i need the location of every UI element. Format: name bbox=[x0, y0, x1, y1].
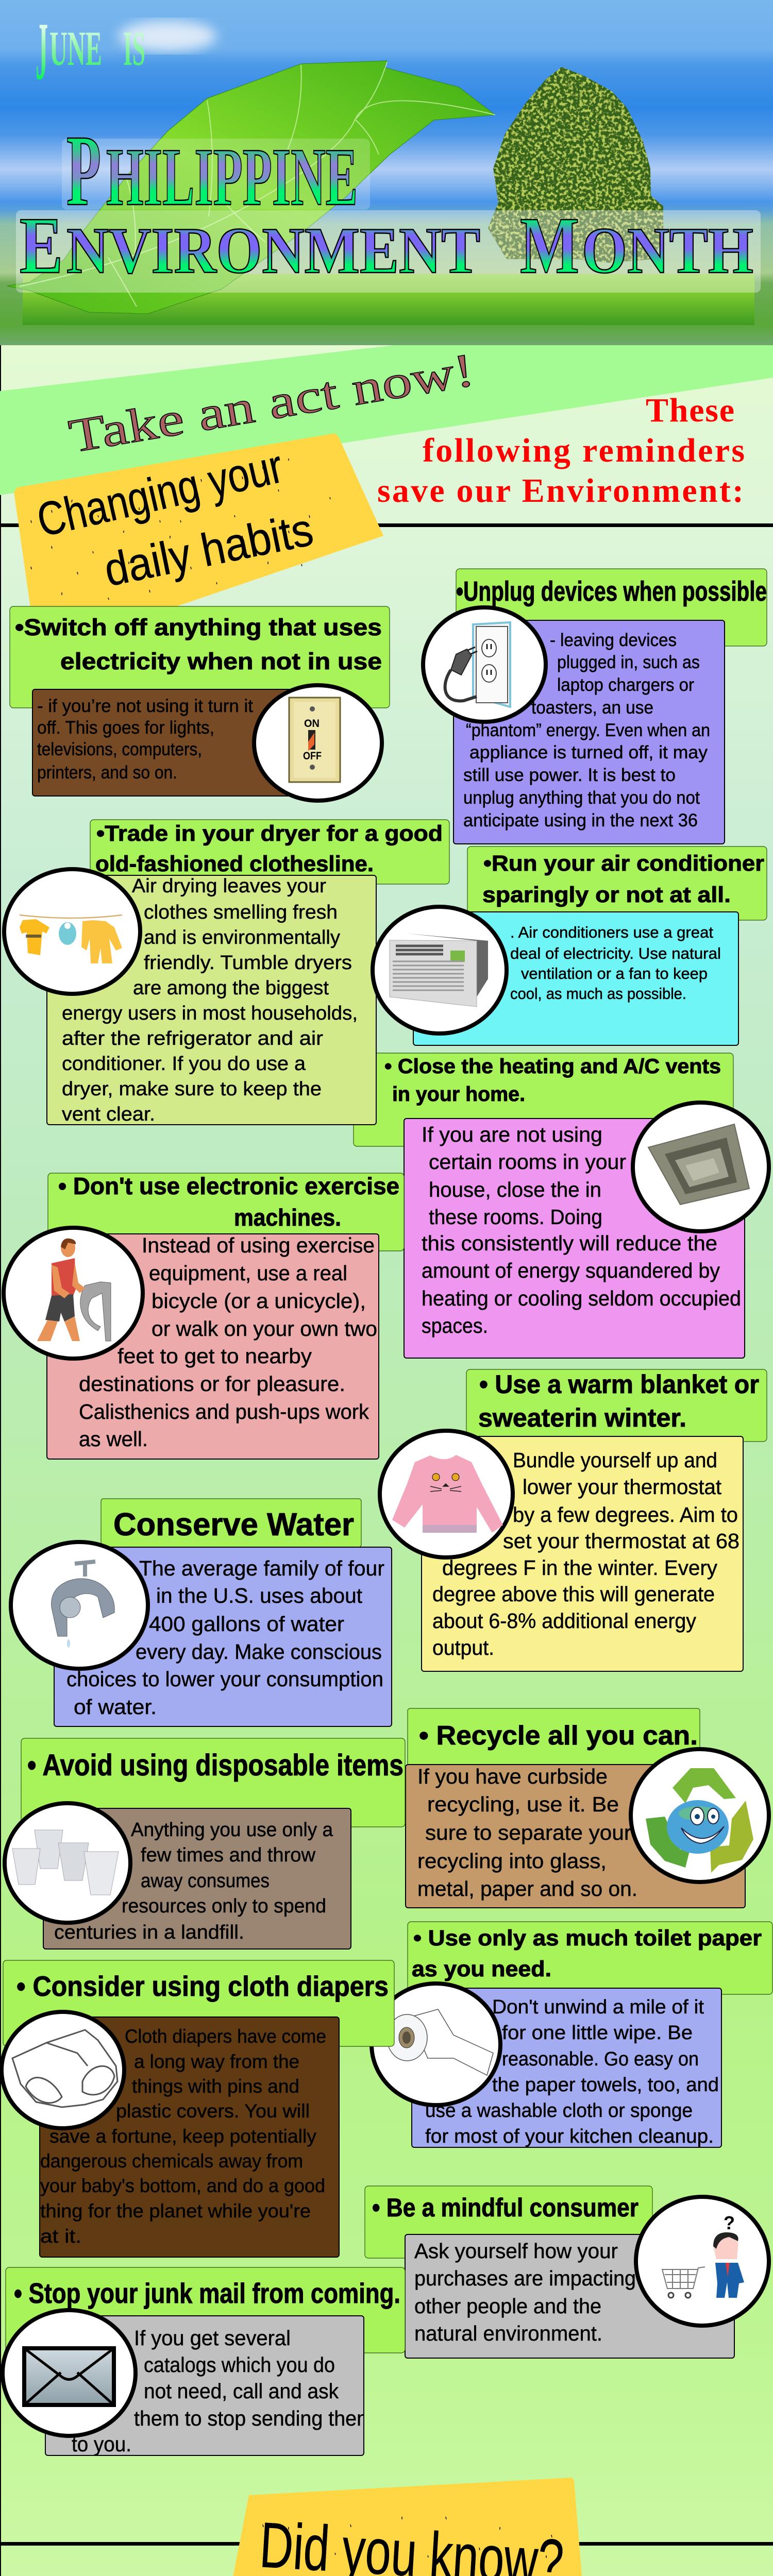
icon: shopper with cart: ? bbox=[724, 2212, 735, 2233]
detail box: recycling into glass, bbox=[417, 1849, 607, 1873]
detail box: bicycle (or a unicycle), bbox=[152, 1289, 366, 1313]
tip: stop junk mail bbox=[3, 2267, 405, 2456]
detail box: resources only to spend bbox=[122, 1895, 326, 1917]
icon: air conditioner bbox=[373, 907, 507, 1033]
detail box: and is environmentally bbox=[144, 927, 340, 948]
heading card bbox=[467, 846, 767, 920]
detail box: thing for the planet while you're bbox=[40, 2200, 311, 2222]
heading card: • Recycle all you can. bbox=[419, 1721, 698, 1751]
intro: These following reminders save our Environment: save our Environment: bbox=[377, 472, 744, 510]
detail box bbox=[412, 1988, 721, 2147]
diagonal green band bbox=[0, 345, 773, 495]
heading card: • Use only as much toilet paper bbox=[413, 1926, 762, 1951]
tip: recycle all you can bbox=[406, 1708, 769, 1908]
detail box: Bundle yourself up and bbox=[513, 1448, 717, 1472]
detail box: for most of your kitchen cleanup. bbox=[425, 2126, 714, 2147]
detail box: Cloth diapers have come bbox=[125, 2026, 326, 2047]
detail box: appliance is turned off, it may bbox=[469, 742, 708, 762]
detail box bbox=[40, 2017, 339, 2257]
detail box: energy users in most households, bbox=[62, 1003, 358, 1024]
detail box: output. bbox=[432, 1636, 494, 1659]
icon: light switch: ON bbox=[304, 718, 320, 730]
sticky note: Did you know? bbox=[227, 2478, 586, 2576]
detail box: dryer, make sure to keep the bbox=[62, 1078, 322, 1100]
title: Philippine: P bbox=[66, 114, 101, 227]
detail box: other people and the bbox=[414, 2294, 601, 2318]
detail box: vent clear. bbox=[62, 1104, 155, 1125]
heading: Take an act now: Take an act now! bbox=[65, 343, 478, 463]
heading card: sweaterin winter. bbox=[478, 1403, 686, 1432]
heading card: • Consider using cloth diapers bbox=[16, 1970, 389, 2002]
tip: don't use electronic exercise machines bbox=[4, 1173, 404, 1459]
heading card: as you need. bbox=[412, 1957, 551, 1981]
detail box: as well. bbox=[79, 1427, 148, 1451]
title: Environment Month: M bbox=[520, 200, 579, 290]
heading card bbox=[354, 1053, 733, 1146]
intro: These following reminders save our Environment bbox=[377, 392, 745, 510]
detail box: clothes smelling fresh bbox=[144, 902, 338, 923]
detail box: these rooms. Doing bbox=[429, 1205, 602, 1229]
heading card bbox=[10, 606, 390, 708]
tree illustration bbox=[488, 67, 663, 263]
detail box: still use power. It is best to bbox=[463, 765, 676, 785]
detail box: Air drying leaves your bbox=[132, 875, 326, 897]
tip: use a warm blanket or sweater bbox=[380, 1369, 767, 1671]
detail box: purchases are impacting bbox=[414, 2266, 636, 2290]
detail box: choices to lower your consumption bbox=[66, 1667, 383, 1691]
title: June is: UNE bbox=[49, 21, 102, 76]
icon: man on treadmill bbox=[4, 1228, 143, 1359]
tip: trade in your dryer bbox=[4, 820, 449, 1125]
tip: cloth diapers bbox=[2, 1960, 394, 2257]
heading card: electricity when not in use bbox=[60, 648, 382, 674]
detail box: away consumes bbox=[141, 1870, 270, 1892]
detail box: centuries in a landfill. bbox=[54, 1922, 244, 1943]
detail box bbox=[413, 912, 738, 1045]
icon: recycling globe bbox=[631, 1749, 769, 1882]
tip: avoid disposable items bbox=[5, 1738, 405, 1949]
leaf illustration bbox=[7, 61, 495, 314]
icon: light switch: OFF bbox=[303, 750, 322, 762]
detail box bbox=[422, 1436, 743, 1671]
icon: shopper with cart bbox=[636, 2197, 769, 2326]
detail box: for one little wipe. Be bbox=[502, 2022, 693, 2044]
detail box: lower your thermostat bbox=[523, 1475, 722, 1499]
icon: faucet bbox=[11, 1542, 148, 1669]
detail box: Don't unwind a mile of it bbox=[492, 1996, 704, 2018]
title backing: Philippine bbox=[62, 139, 370, 210]
detail box: things with pins and bbox=[132, 2076, 299, 2097]
detail box: Instead of using exercise bbox=[142, 1233, 375, 1257]
heading card: •Trade in your dryer for a good bbox=[96, 821, 443, 846]
icon: envelope bbox=[3, 2310, 136, 2436]
detail box: toasters, an use bbox=[531, 698, 653, 718]
title: Environment Month: NVIRONMENT bbox=[66, 215, 480, 287]
heading card: Conserve Water bbox=[113, 1507, 354, 1543]
detail box: ventilation or a fan to keep bbox=[521, 964, 708, 982]
heading card: • Stop your junk mail from coming. bbox=[14, 2277, 400, 2309]
sticky note: Changing your daily habits: daily habits bbox=[100, 504, 317, 597]
detail box bbox=[32, 689, 331, 796]
tip: conserve water bbox=[11, 1499, 392, 1726]
heading card: • Be a mindful consumer bbox=[372, 2193, 638, 2222]
heading card bbox=[21, 1738, 405, 1827]
detail box bbox=[406, 1765, 745, 1908]
detail box bbox=[405, 2234, 734, 2358]
detail box: sure to separate your bbox=[425, 1821, 631, 1844]
detail box: destinations or for pleasure. bbox=[79, 1372, 345, 1396]
heading card bbox=[365, 2186, 652, 2258]
detail box: Anything you use only a bbox=[131, 1819, 333, 1841]
title: Philippine: HILIPPINE bbox=[106, 131, 358, 223]
detail box: Ask yourself how your bbox=[414, 2239, 618, 2263]
tip: unplug devices bbox=[423, 569, 767, 844]
tip: run your air conditioner bbox=[373, 846, 767, 1045]
heading card bbox=[456, 569, 767, 646]
icon: pink sweater bbox=[380, 1431, 513, 1557]
heading card bbox=[466, 1369, 767, 1442]
sticky note: Changing your daily habits bbox=[14, 433, 383, 611]
detail box: about 6-8% additional energy bbox=[432, 1609, 696, 1633]
detail box bbox=[54, 1547, 392, 1726]
detail box: in the U.S. uses about bbox=[156, 1584, 363, 1607]
heading card: machines. bbox=[234, 1204, 341, 1231]
detail box: this consistently will reduce the bbox=[422, 1231, 717, 1255]
intro: These following reminders save our Environment: following reminders bbox=[423, 432, 745, 469]
heading card: •Run your air conditioner bbox=[483, 851, 764, 876]
detail box: friendly. Tumble dryers bbox=[144, 952, 352, 974]
tip: switch off bbox=[10, 606, 390, 801]
detail box: If you are not using bbox=[422, 1123, 602, 1146]
heading card bbox=[101, 1499, 361, 1547]
detail box: degrees F in the winter. Every bbox=[442, 1556, 717, 1580]
icon: air vent bbox=[633, 1103, 769, 1231]
detail box: If you get several bbox=[134, 2326, 291, 2350]
detail box: save a fortune, keep potentially bbox=[49, 2126, 316, 2147]
title: Environment Month: E bbox=[20, 200, 63, 290]
heading card: in your home. bbox=[392, 1083, 525, 1106]
detail box: . Air conditioners use a great bbox=[510, 923, 713, 941]
left page border bbox=[0, 345, 1, 2576]
detail box: not need, call and ask bbox=[144, 2379, 339, 2403]
section divider bbox=[0, 523, 773, 527]
heading card: sparingly or not at all. bbox=[482, 883, 731, 907]
heading card: • Close the heating and A/C vents bbox=[384, 1055, 721, 1078]
detail box: them to stop sending them bbox=[134, 2406, 374, 2430]
icon: light switch bbox=[254, 685, 382, 801]
heading card bbox=[48, 1173, 404, 1251]
detail box: a long way from the bbox=[134, 2051, 299, 2072]
detail box: to you. bbox=[72, 2432, 131, 2456]
detail box: degree above this will generate bbox=[432, 1582, 715, 1606]
heading card bbox=[3, 1960, 394, 2046]
icon: toilet roll bbox=[372, 1984, 500, 2105]
detail box: cool, as much as possible. bbox=[510, 985, 686, 1003]
heading card bbox=[6, 2267, 405, 2353]
icon: plug and outlet bbox=[423, 607, 546, 722]
detail box: are among the biggest bbox=[133, 977, 329, 999]
detail box: televisions, computers, bbox=[37, 739, 202, 759]
detail box: or walk on your own two bbox=[152, 1317, 377, 1341]
detail box: plastic covers. You will bbox=[116, 2100, 310, 2122]
detail box: off. This goes for lights, bbox=[37, 718, 214, 738]
title backing: Environment Month bbox=[16, 210, 761, 293]
detail box bbox=[47, 1233, 379, 1459]
detail box: laptop chargers or bbox=[557, 675, 694, 695]
detail box: your baby's bottom, and do a good bbox=[40, 2175, 325, 2196]
detail box: set your thermostat at 68 bbox=[503, 1529, 740, 1553]
detail box: 400 gallons of water bbox=[149, 1612, 344, 1636]
icon: cloth diaper bbox=[2, 2012, 124, 2128]
title: June is: J bbox=[36, 5, 48, 97]
detail box: use a washable cloth or sponge bbox=[425, 2100, 693, 2122]
detail box: The average family of four bbox=[139, 1556, 384, 1580]
detail box: - leaving devices bbox=[550, 630, 677, 650]
detail box: natural environment. bbox=[414, 2321, 602, 2345]
detail box: certain rooms in your bbox=[429, 1150, 626, 1174]
tip: close vents bbox=[354, 1053, 769, 1358]
detail box: recycling, use it. Be bbox=[427, 1792, 619, 1816]
heading card: • Avoid using disposable items bbox=[27, 1749, 404, 1782]
sticky note: Changing your daily habits: Changing your bbox=[32, 440, 288, 547]
detail box: feet to get to nearby bbox=[117, 1344, 312, 1368]
heading card: • Use a warm blanket or bbox=[479, 1370, 759, 1399]
tip: mindful consumer bbox=[365, 2186, 769, 2358]
detail box: dangerous chemicals away from bbox=[40, 2150, 303, 2172]
intro: These following reminders save our Environment: These bbox=[646, 392, 734, 429]
detail box bbox=[404, 1118, 745, 1358]
detail box: conditioner. If you do use a bbox=[62, 1053, 306, 1075]
section divider: Did you know bbox=[0, 2542, 773, 2546]
detail box: by a few degrees. Aim to bbox=[513, 1503, 738, 1527]
detail box: few times and throw bbox=[141, 1844, 316, 1866]
detail box: at it. bbox=[40, 2226, 81, 2247]
detail box: plugged in, such as bbox=[557, 652, 700, 672]
detail box: catalogs which you do bbox=[144, 2353, 335, 2377]
detail box: every day. Make conscious bbox=[136, 1640, 382, 1664]
tip: toilet paper bbox=[372, 1922, 772, 2147]
detail box: heating or cooling seldom occupied bbox=[422, 1286, 741, 1310]
detail box: unplug anything that you do not bbox=[463, 788, 700, 808]
heading card: old-fashioned clothesline. bbox=[95, 852, 374, 876]
detail box: Calisthenics and push-ups work bbox=[79, 1400, 369, 1423]
detail box: after the refrigerator and air bbox=[62, 1028, 323, 1049]
detail box: of water. bbox=[74, 1695, 157, 1719]
detail box: metal, paper and so on. bbox=[417, 1877, 637, 1901]
detail box: equipment, use a real bbox=[149, 1261, 347, 1285]
icon: clothesline bbox=[4, 869, 140, 994]
detail box: reasonable. Go easy on bbox=[502, 2048, 699, 2070]
title: Environment Month: ONTH bbox=[582, 215, 753, 287]
detail box bbox=[47, 875, 376, 1125]
detail box: amount of energy squandered by bbox=[422, 1259, 720, 1282]
detail box: spaces. bbox=[422, 1314, 488, 1337]
heading card bbox=[408, 1708, 700, 1770]
detail box: If you have curbside bbox=[417, 1765, 608, 1788]
detail box: “phantom” energy. Even when an bbox=[466, 720, 710, 740]
detail box: the paper towels, too, and bbox=[492, 2074, 719, 2096]
detail box: deal of electricity. Use natural bbox=[510, 944, 721, 962]
detail box bbox=[453, 620, 725, 844]
header banner bbox=[0, 0, 773, 345]
heading card bbox=[408, 1922, 772, 1994]
heading card bbox=[90, 820, 449, 884]
header banner: IS bbox=[123, 21, 145, 76]
detail box: anticipate using in the next 36 bbox=[463, 810, 698, 831]
detail box: house, close the in bbox=[429, 1178, 601, 1201]
heading card: • Don't use electronic exercise bbox=[58, 1173, 399, 1199]
heading card: •Switch off anything that uses bbox=[15, 614, 382, 640]
icon: foam cups bbox=[5, 1803, 130, 1923]
detail box: printers, and so on. bbox=[37, 762, 177, 783]
detail box bbox=[43, 1808, 351, 1949]
detail box: - if you’re not using it turn it bbox=[37, 696, 253, 716]
detail box bbox=[45, 2316, 374, 2456]
